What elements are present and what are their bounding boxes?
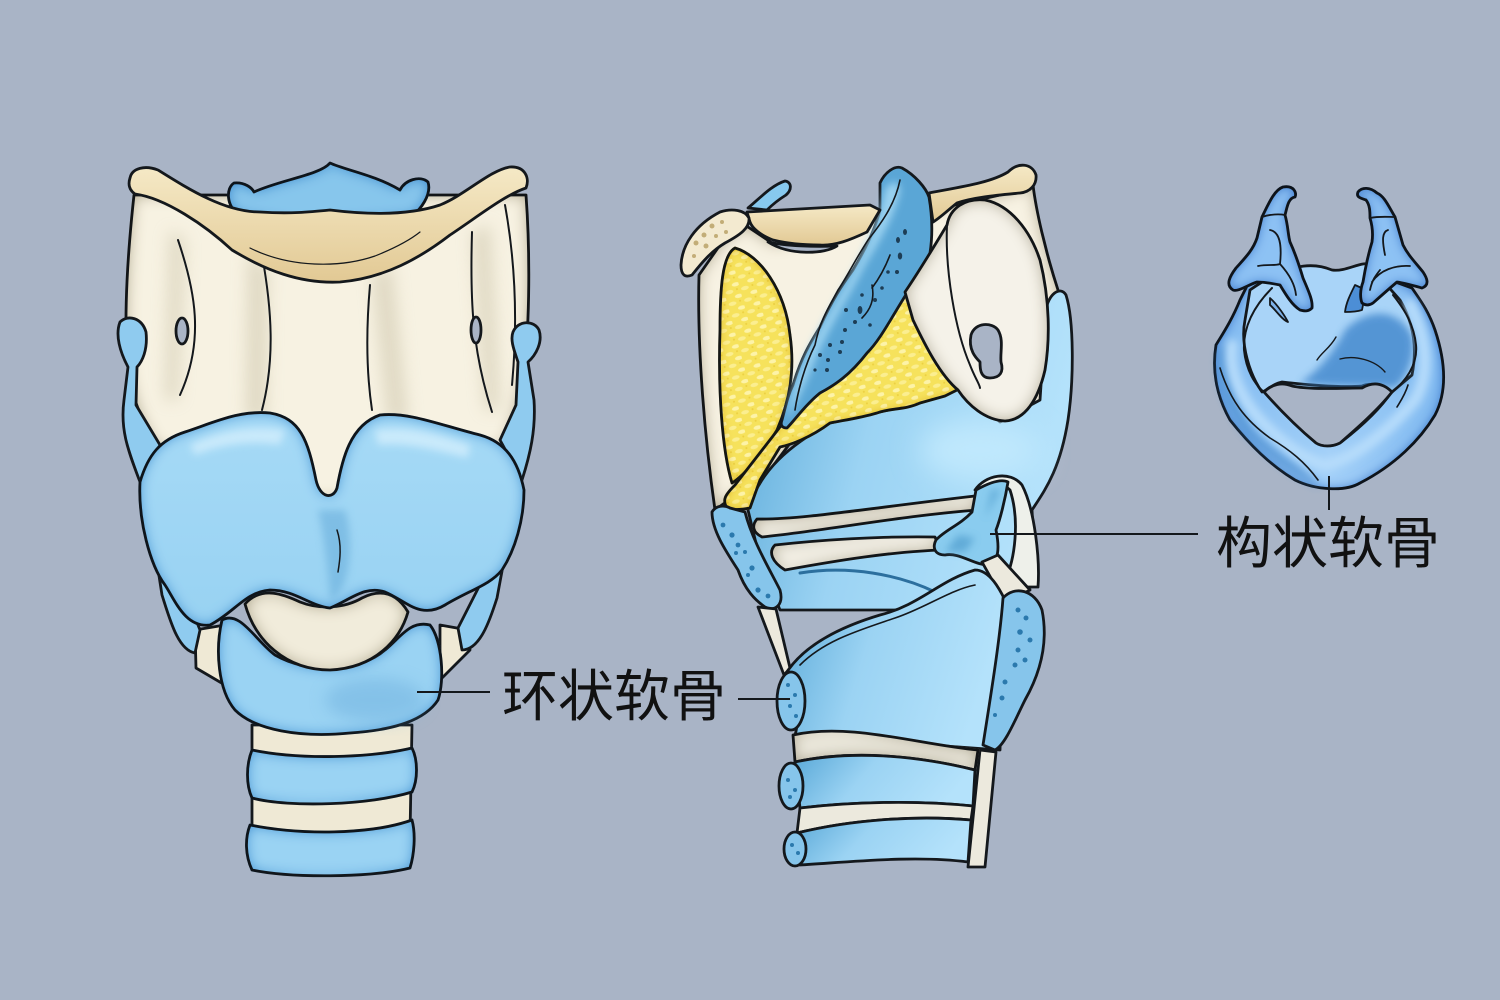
yellow gland diagonal [725,293,963,510]
ring section low [784,832,806,866]
inferior horn right [458,555,505,650]
epiglottis tip [228,163,429,225]
hyoid bone [129,167,527,282]
left arytenoid details [1258,214,1296,295]
leader line: cricoid side [738,698,790,700]
epiglottis inner lines [795,180,900,410]
right arytenoid details [1370,217,1410,290]
top view of cricoid ring with arytenoids [1215,187,1444,489]
ventricle line [800,570,935,592]
lamina pits right [993,608,1032,717]
epiglottis pits [813,229,907,372]
tracheal blue band [795,755,975,808]
cricoid inner line [800,585,975,665]
hyoid horn speckles [692,220,728,258]
arytenoid cartilage [934,481,1008,565]
ring inner contour [1244,288,1416,446]
hyoid band right [929,165,1036,222]
superior thyroid ligament left with nodule [118,318,160,482]
arytenoid shadow [945,490,1000,552]
tracheal ring upper [248,748,416,804]
vocal fold upper [754,496,977,537]
thyroid cartilage plate [126,195,529,500]
cricoid lamina dotted [983,591,1044,750]
cricoarytenoid ligament [982,555,1030,603]
posterior tracheal wall [968,750,996,867]
thin anterior ligament [758,607,790,675]
oval foramen [970,325,1002,378]
leader line: arytenoid side [990,533,1198,535]
ring crease [1220,368,1408,480]
hyoid window [768,242,837,252]
leader line: cricoid front [417,691,490,693]
ring highlight [1231,305,1425,465]
vocal fold lower [772,537,940,570]
plate dark shading [1300,314,1413,388]
tracheal cream ring two [797,802,973,833]
ring dark outer shade [1217,340,1320,487]
midline crease [337,530,340,572]
right vocal shade [1345,285,1366,312]
left vocal process [1270,298,1288,322]
cricoid side [785,570,1005,750]
thyroid gray oval [905,200,1048,421]
shield shading [190,428,470,600]
central aperture [1264,384,1392,446]
thyroid shading [165,225,500,425]
yellow gland left [720,248,792,483]
leader line: arytenoid top [1328,476,1330,510]
hyoid band left [747,205,880,245]
left arytenoid [1229,187,1312,311]
arytenoid arc [975,476,1038,587]
label: cricoid: 环状软骨 [502,665,726,728]
tracheal cream ring one [793,731,978,770]
ring section top [777,672,805,730]
bright highlight [920,420,1040,480]
foramen right [471,317,481,343]
ring section mid [779,763,803,809]
oval inner ridge [947,225,980,388]
epiglottis stalk and lamina left [712,506,781,609]
inner plate [1244,264,1414,392]
cricoid shading [325,678,425,722]
superior thyroid ligament right with nodule [500,323,540,480]
hyoid greater horn [681,210,749,276]
tracheal blue base [797,818,971,865]
ring pits [786,683,800,855]
front view of larynx [118,163,540,876]
hyoid lesser horn [748,181,790,210]
epiglottis section [781,167,932,428]
foramen left [176,318,188,344]
lamina pits left [721,523,770,598]
outer ring [1215,280,1444,489]
thyroid ridge lines [178,205,515,412]
side section of larynx [681,165,1072,867]
plate cracks [1317,337,1385,372]
lower horn ligaments [195,625,470,685]
epiglottis light edge [787,182,900,420]
label: arytenoid: 构状软骨 [1216,512,1440,575]
right arytenoid [1357,188,1427,305]
thyroid lamina blue shield [140,413,524,625]
cricoid arch [218,618,442,734]
internal blue cavity [748,291,1072,610]
tracheal ring lower [246,820,414,876]
thyroid cream body [699,185,1059,510]
inferior horn left [155,550,200,653]
hyoid crease [250,232,420,264]
cricoid inner cream window [245,593,408,670]
trachea cream core [252,725,412,835]
